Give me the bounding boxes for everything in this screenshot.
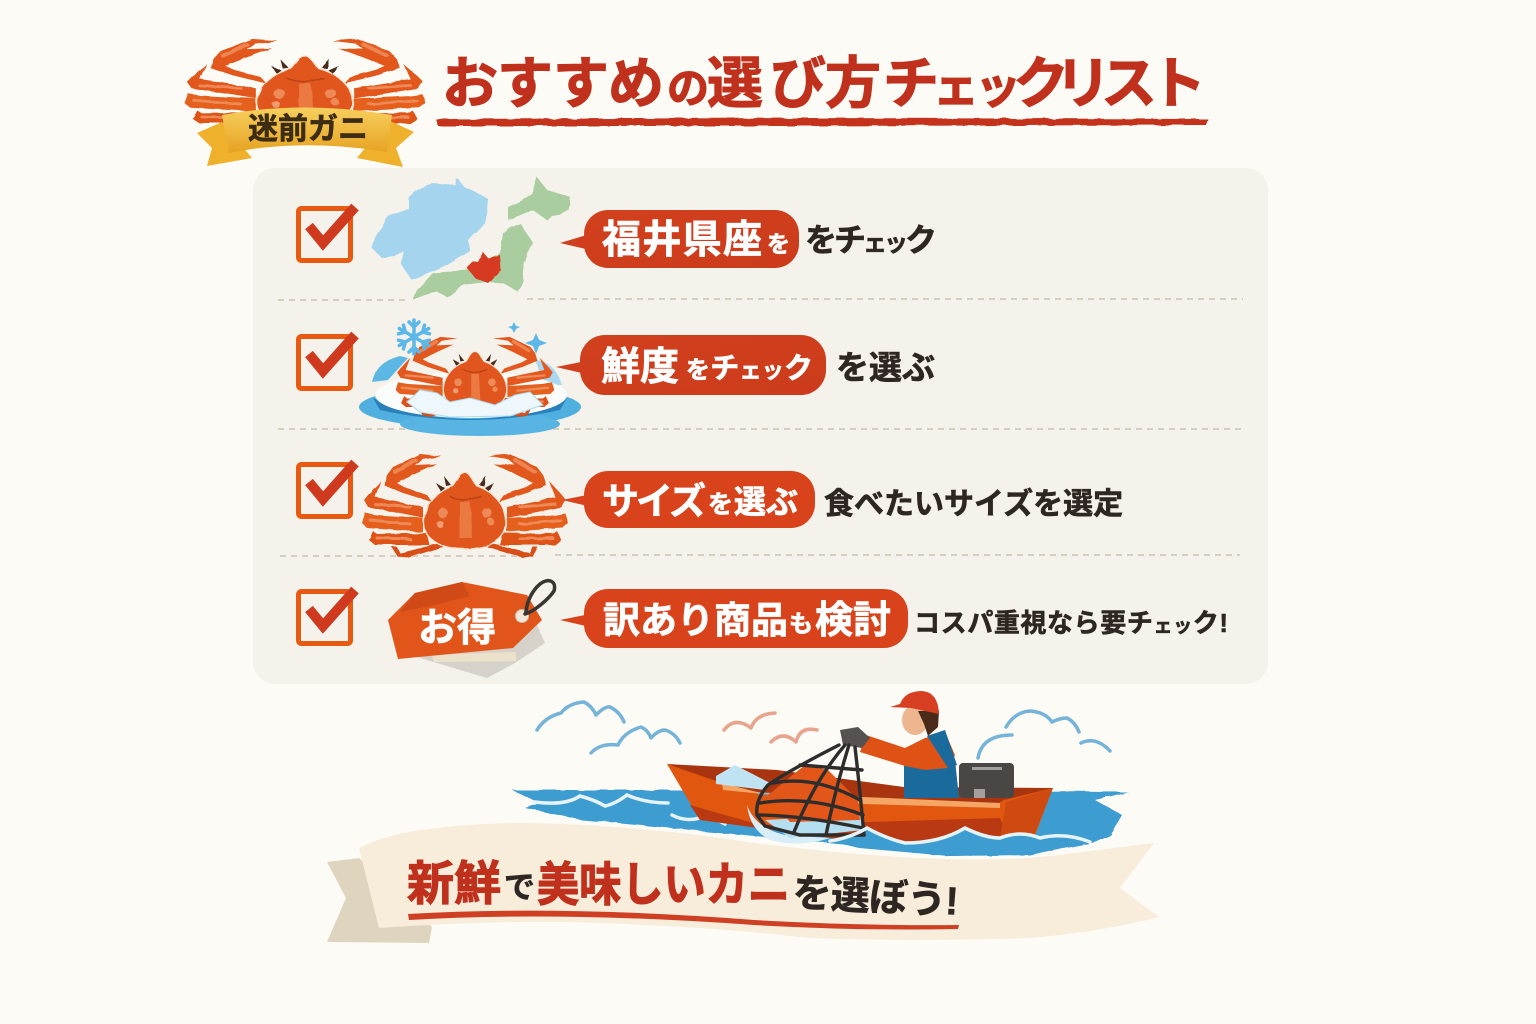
ribbon band [222, 108, 392, 153]
banner message [407, 857, 960, 930]
ribbon tails [197, 120, 414, 167]
title: 方 [825, 52, 881, 115]
title: 選 [707, 52, 763, 115]
callout: size: を [708, 491, 733, 519]
sea [512, 790, 1128, 856]
callout: size: 選ぶ [734, 484, 798, 520]
text: size note: 食べたいサイズを選定 [824, 487, 1123, 521]
banner message: 新鮮 [407, 857, 501, 910]
panel: checklist [253, 168, 1268, 684]
icon: crab on ice [359, 320, 581, 436]
icon: sparkles [508, 322, 547, 354]
icon: map of Japan [373, 177, 570, 300]
foam splash [747, 805, 830, 844]
callout: freshness [556, 335, 826, 395]
title: リ [1055, 52, 1111, 115]
fisherman [840, 691, 959, 798]
row 2 [298, 320, 935, 436]
icon: snowflake [397, 320, 431, 354]
title: ス [1101, 52, 1157, 115]
crabs in net [768, 765, 860, 822]
icon: price tag [388, 581, 555, 678]
icon: checkbox 3 [298, 463, 355, 516]
banner message: を選ぼう! [792, 872, 960, 924]
callout: bargain [560, 589, 908, 648]
title: び [770, 52, 826, 115]
title: チ [883, 52, 939, 115]
callout: bargain: 訳あり商品 [603, 600, 788, 641]
callout: size [562, 471, 815, 528]
title underline [436, 118, 1208, 126]
callout: freshness: をチェック [686, 353, 813, 385]
boat [667, 764, 1053, 847]
bottom banner [327, 823, 1159, 943]
icon: engine box [959, 763, 1014, 798]
net [757, 745, 864, 835]
waves front [830, 828, 1090, 843]
callout: bargain: 検討 [815, 600, 891, 642]
banner message: 美味しいカニ [537, 858, 790, 911]
title: お [442, 52, 498, 115]
icon: checkbox 4 [298, 590, 355, 644]
text: choose: を選ぶ [836, 349, 935, 386]
row 3 [298, 454, 1123, 558]
callout: Fukui: 福井県座 [602, 219, 762, 262]
title: す [497, 52, 553, 115]
callout: Fukui: を [767, 231, 790, 257]
title: ッ [975, 61, 1021, 113]
title: す [553, 52, 609, 115]
callout: bargain: も [789, 611, 813, 638]
icon: crab [362, 454, 568, 558]
waves [535, 795, 725, 824]
text: check: をチェック [805, 222, 937, 258]
badge label: 迷前ガニ [248, 113, 368, 146]
title: め [608, 52, 664, 115]
title: ェ [933, 61, 979, 113]
icon: checkbox 1 [298, 207, 355, 260]
callout: Fukui [560, 210, 799, 268]
icon: badge crab [184, 39, 426, 136]
row 4 [298, 581, 1228, 678]
divider lines [278, 299, 1243, 556]
callout: size: サイズ [602, 481, 706, 522]
badge: crab with ribbon [184, 39, 426, 167]
title: の [667, 65, 709, 112]
banner message: で [504, 870, 535, 905]
water in front of hull [830, 828, 1090, 856]
icon: checkbox 2 [298, 335, 355, 388]
title: ク [1013, 52, 1069, 115]
title: ト [1150, 52, 1206, 115]
callout: freshness: 鮮度 [601, 346, 679, 389]
icon: price tag: お得 [418, 607, 496, 650]
text: bargain note: コスパ重視なら要チェック! [914, 608, 1228, 638]
birds: blue [537, 702, 1110, 758]
illustration: fishing boat scene [327, 691, 1159, 943]
row 1 [298, 177, 937, 300]
birds: pink [724, 713, 817, 742]
